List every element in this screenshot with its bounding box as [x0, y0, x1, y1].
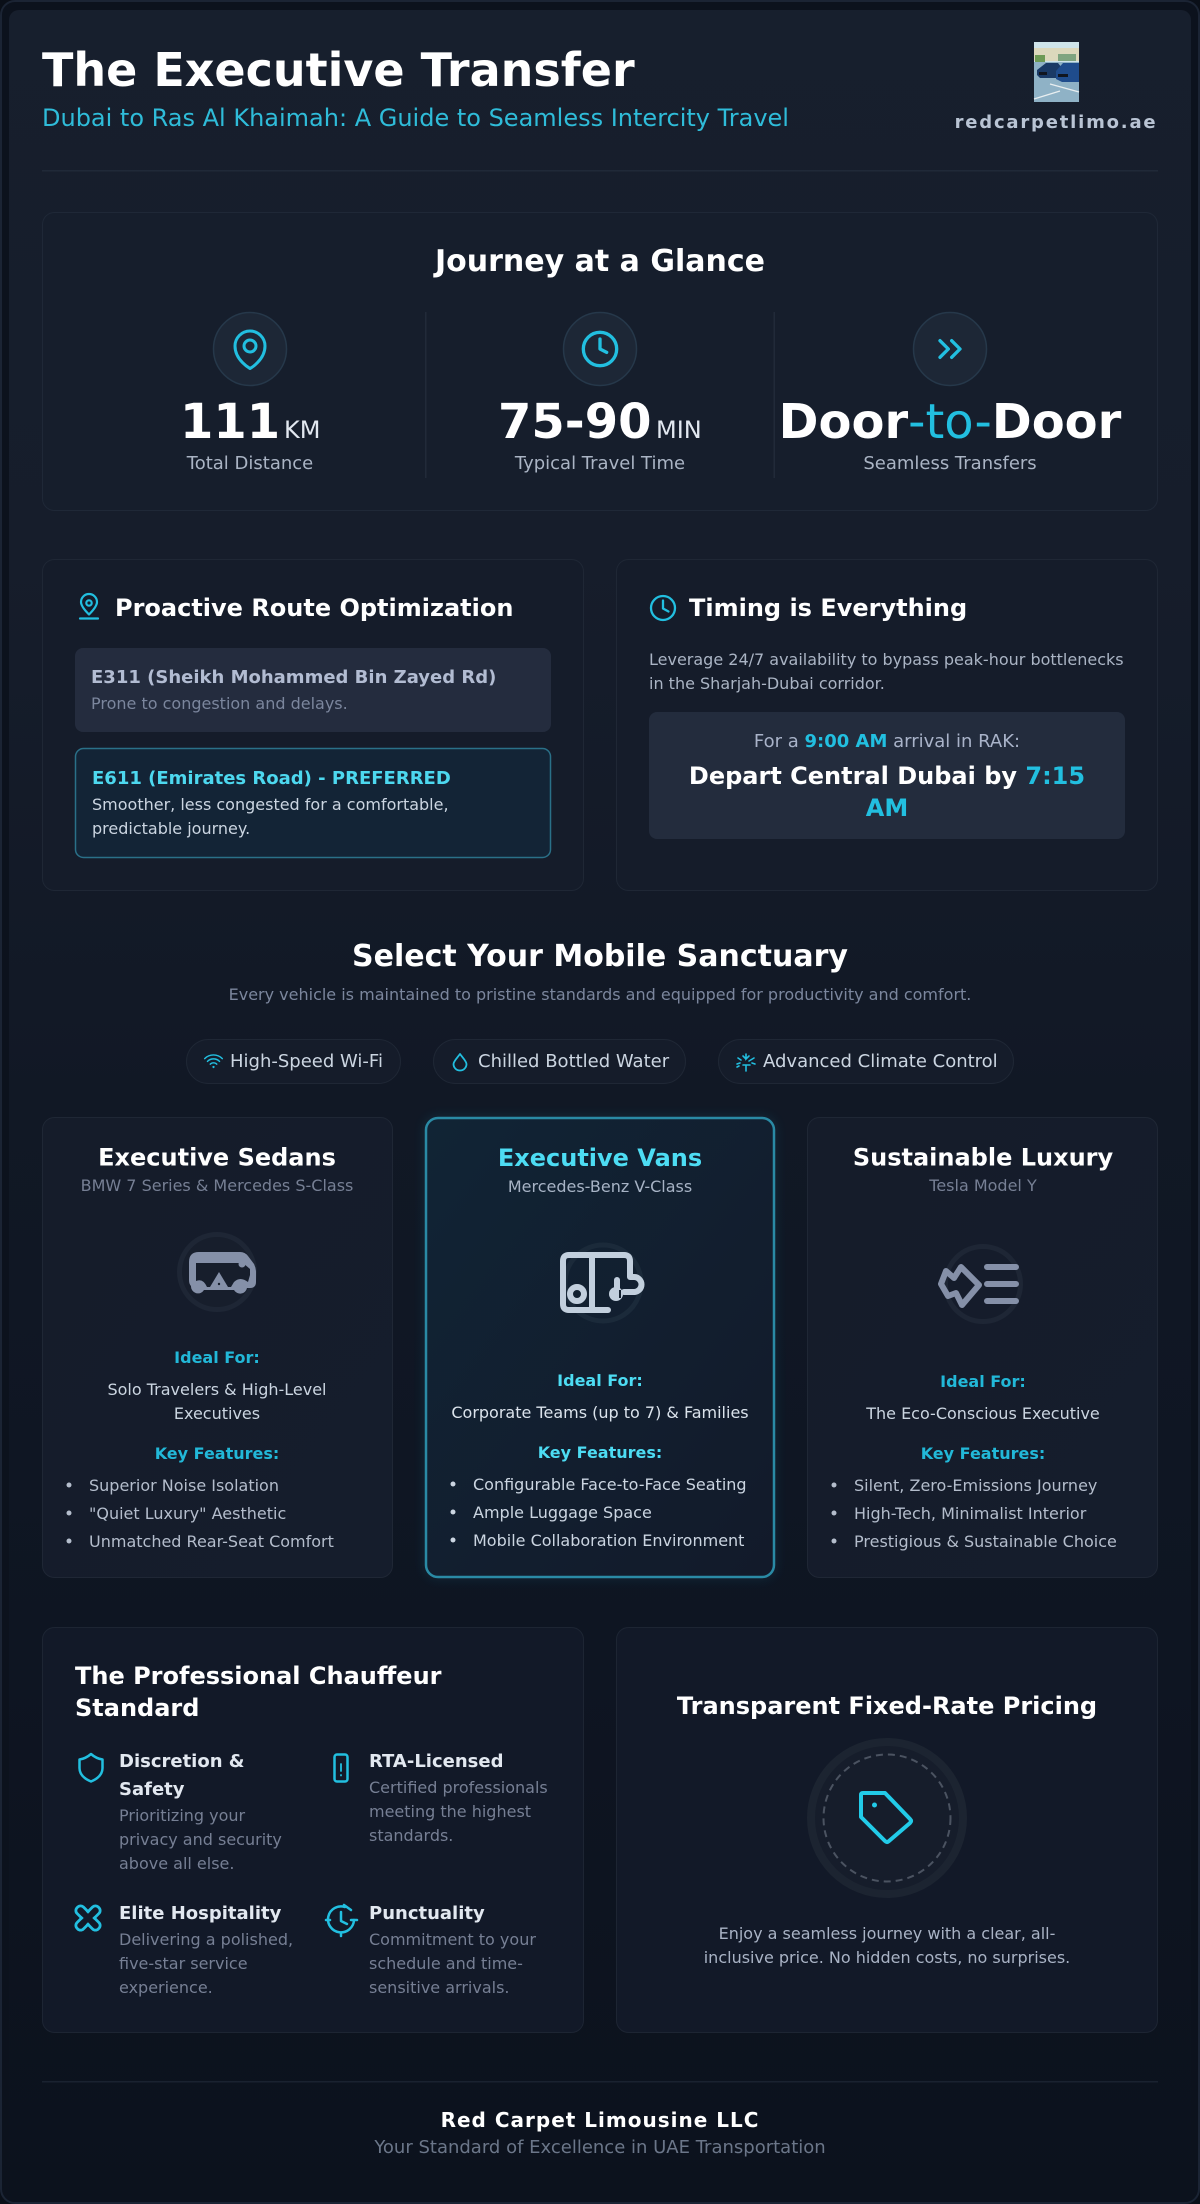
feature list: Silent, Zero-Emissions Journey: [854, 1476, 1097, 1495]
heading: [75, 1662, 442, 1722]
panel: sustainable luxury: [808, 1118, 1158, 1578]
amenity pill: wifi: [186, 1040, 400, 1084]
feature list: "Quiet Luxury" Aesthetic: [89, 1504, 286, 1523]
website: redcarpetlimo.ae: [955, 112, 1157, 133]
panel: executive vans: Ideal For:: [557, 1371, 643, 1390]
feature list: [450, 1475, 747, 1550]
route: E311: [75, 648, 551, 732]
panel: executive vans: Corporate Teams (up to 7) & Families: [451, 1403, 749, 1422]
route: E311: E311 (Sheikh Mohammed Bin Zayed Rd): [91, 667, 496, 688]
icon: route pin: [80, 594, 98, 618]
item: punctuality: schedule and time-: [369, 1954, 523, 1973]
panel: journey at a glance: [42, 212, 1158, 510]
panel: sustainable luxury: Ideal For:: [940, 1372, 1026, 1391]
footer: Red Carpet Limousine LLC: [441, 2108, 759, 2132]
description: Leverage 24/7 availability to bypass peak-hour bottlenecks: [649, 650, 1124, 669]
heading: Transparent Fixed-Rate Pricing: [677, 1692, 1097, 1720]
feature list: Superior Noise Isolation: [89, 1476, 279, 1495]
feature list: Prestigious & Sustainable Choice: [854, 1532, 1117, 1551]
footer: Your Standard of Excellence in UAE Transportation: [373, 2137, 826, 2158]
panel: timing: [616, 560, 1158, 890]
panel: sustainable luxury: Tesla Model Y: [928, 1176, 1037, 1195]
description: [704, 1924, 1070, 1967]
panel: executive sedans: BMW 7 Series & Mercedes S-Class: [81, 1176, 353, 1195]
footer: [373, 2108, 826, 2158]
panel: executive vans: [426, 1118, 774, 1577]
amenity pill: water: [434, 1040, 686, 1084]
item: discretion: Prioritizing your: [119, 1806, 246, 1825]
feature list: [66, 1476, 334, 1551]
description: in the Sharjah-Dubai corridor.: [649, 674, 885, 693]
panel: executive sedans: [42, 1118, 392, 1578]
item: punctuality: sensitive arrivals.: [369, 1978, 509, 1997]
item: RTA licensed: [334, 1751, 548, 1845]
item: hospitality: experience.: [119, 1978, 213, 1997]
description: Enjoy a seamless journey with a clear, all-: [719, 1924, 1055, 1943]
item: discretion: Safety: [119, 1779, 185, 1800]
panel: executive sedans: Executive Sedans: [98, 1144, 336, 1172]
panel: executive sedans: Executives: [174, 1404, 260, 1423]
icon: pin: [214, 312, 286, 386]
amenity pill: wifi: High-Speed Wi-Fi: [230, 1051, 383, 1072]
route: E611 preferred: E611 (Emirates Road) - PREFERRED: [92, 768, 451, 789]
feature list: Configurable Face-to-Face Seating: [473, 1475, 747, 1494]
icon: clock: [564, 312, 636, 386]
heading: Timing is Everything: [689, 594, 967, 622]
stat: travel time: Typical Travel Time: [514, 453, 685, 474]
route: E611 preferred: predictable journey.: [92, 819, 250, 838]
item: RTA licensed: Certified professionals: [369, 1778, 548, 1797]
stat: distance: KM: [284, 416, 320, 444]
panel: executive sedans: Ideal For:: [174, 1348, 260, 1367]
section heading: mobile sanctuary: Select Your Mobile Sanctuary: [352, 939, 848, 974]
feature list: Unmatched Rear-Seat Comfort: [89, 1532, 334, 1551]
item: hospitality: Elite Hospitality: [119, 1903, 282, 1924]
section heading: mobile sanctuary: [229, 939, 971, 1004]
route: E311: Prone to congestion and delays.: [91, 694, 348, 713]
item: RTA licensed: RTA-Licensed: [369, 1751, 503, 1772]
panel: chauffeur standard: [42, 1628, 584, 2032]
item: RTA licensed: meeting the highest: [369, 1802, 531, 1821]
icon: license: [334, 1754, 348, 1782]
panel: executive vans: Mercedes-Benz V-Class: [508, 1177, 692, 1196]
heading: Standard: [75, 1694, 199, 1722]
description: inclusive price. No hidden costs, no surprises.: [704, 1948, 1070, 1967]
panel: pricing: [616, 1628, 1158, 2032]
icon: sedan: [180, 1234, 256, 1310]
item: RTA licensed: standards.: [369, 1826, 453, 1845]
icon: water drop: [454, 1054, 466, 1070]
departure callout: Depart Central Dubai by 7:15: [689, 762, 1085, 790]
departure callout: For a 9:00 AM arrival in RAK:: [754, 731, 1020, 752]
logo photo: [1034, 42, 1079, 102]
icon: shield: [80, 1754, 102, 1782]
item: discretion: above all else.: [119, 1854, 234, 1873]
icon: climate: [737, 1054, 755, 1071]
panel: sustainable luxury: Key Features:: [921, 1444, 1045, 1463]
heading: Proactive Route Optimization: [115, 594, 513, 622]
section heading: mobile sanctuary: Every vehicle is maintained to pristine standards and equipped for productivity and comfort.: [229, 985, 971, 1004]
departure callout: AM: [866, 794, 908, 822]
feature list: [832, 1476, 1117, 1551]
icon: crossed tools: [74, 1904, 102, 1932]
route: E611 preferred: Smoother, less congested for a comfortable,: [92, 795, 449, 814]
stat: door to door: [779, 312, 1122, 474]
heading: Journey at a Glance: [433, 244, 765, 279]
amenity pill: climate: [718, 1040, 1014, 1084]
item: punctuality: Commitment to your: [369, 1930, 536, 1949]
title: The Executive Transfer: [42, 43, 635, 97]
panel: executive sedans: Key Features:: [155, 1444, 279, 1463]
feature list: High-Tech, Minimalist Interior: [854, 1504, 1087, 1523]
panel: executive vans: Key Features:: [538, 1443, 662, 1462]
icon: electric car: [941, 1246, 1020, 1322]
description: [649, 650, 1124, 693]
item: discretion: privacy and security: [119, 1830, 282, 1849]
subtitle: Dubai to Ras Al Khaimah: A Guide to Seamless Intercity Travel: [42, 104, 789, 132]
panel: sustainable luxury: The Eco-Conscious Executive: [865, 1404, 1100, 1423]
departure callout: [649, 712, 1125, 839]
amenity pill: climate: Advanced Climate Control: [763, 1051, 998, 1072]
item: discretion: [80, 1751, 282, 1873]
item: hospitality: [74, 1903, 293, 1997]
feature list: Mobile Collaboration Environment: [473, 1531, 744, 1550]
stat: door to door: Seamless Transfers: [863, 453, 1037, 474]
icon: clock arrows: [326, 1905, 357, 1936]
heading: The Professional Chauffeur: [75, 1662, 442, 1690]
icon: wifi: [205, 1055, 222, 1067]
stat: distance: 111: [180, 394, 280, 450]
feature list: Ample Luggage Space: [473, 1503, 652, 1522]
item: punctuality: Punctuality: [369, 1903, 485, 1924]
stat: distance: Total Distance: [186, 453, 313, 474]
panel: executive sedans: Solo Travelers & High-Level: [107, 1380, 327, 1399]
icon: price tag: [811, 1742, 963, 1894]
panel: sustainable luxury: Sustainable Luxury: [853, 1144, 1114, 1172]
stat: door to door: Door-to-Door: [779, 394, 1122, 450]
stat: distance: [180, 312, 320, 474]
route: E611 preferred: [76, 748, 550, 858]
panel: route optimization: [42, 560, 584, 890]
icon: chevrons: [914, 312, 986, 386]
icon: van: [563, 1245, 642, 1321]
stat: travel time: 75-90: [498, 394, 652, 450]
item: punctuality: [326, 1903, 536, 1997]
item: discretion: Discretion &: [119, 1751, 244, 1772]
icon: clock: [651, 596, 675, 620]
stat: travel time: [498, 312, 702, 474]
item: hospitality: Delivering a polished,: [119, 1930, 293, 1949]
panel: executive vans: Executive Vans: [498, 1144, 702, 1172]
header: [42, 42, 1157, 133]
amenity pill: water: Chilled Bottled Water: [478, 1051, 670, 1072]
stat: travel time: MIN: [656, 416, 702, 444]
item: hospitality: five-star service: [119, 1954, 248, 1973]
